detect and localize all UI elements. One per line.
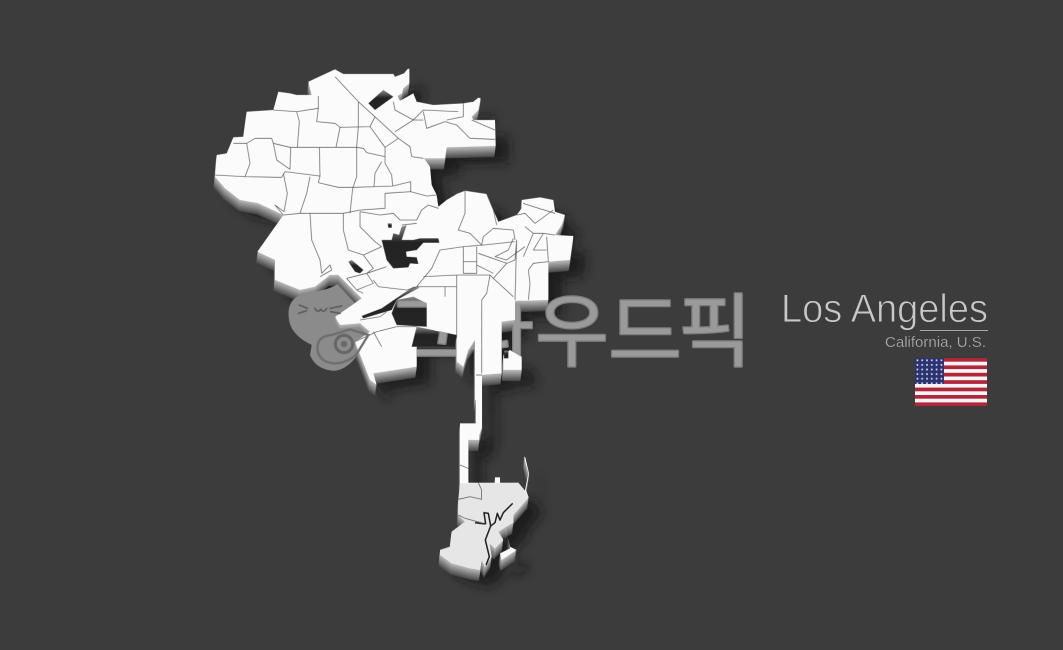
- watermark: Korean wordmark: [387, 288, 752, 377]
- harbor channels: [475, 503, 513, 565]
- harbor surface tint: [440, 483, 529, 570]
- cat face: [299, 305, 342, 313]
- title: city name: Los Angeles: [781, 287, 988, 331]
- icon: United States flag: [915, 358, 987, 406]
- map of Los Angeles: [214, 68, 587, 587]
- watermark: Korean wordmark: 그: [387, 288, 461, 377]
- title underline: [920, 330, 988, 331]
- map extrusion sides: [214, 70, 573, 581]
- watermark: Korean wordmark: 우: [535, 288, 609, 377]
- watermark: Korean wordmark: 라: [460, 288, 534, 377]
- map drop shadow: [228, 85, 587, 587]
- map top surface: [215, 68, 573, 570]
- camera: [317, 329, 368, 363]
- watermark: Korean wordmark: 드: [608, 288, 682, 377]
- subtitle: state and country: California, U.S.: [885, 335, 986, 351]
- holes and channels in the map: [348, 90, 508, 358]
- harbor district borders: [458, 375, 483, 523]
- harbor channels and borders: [440, 375, 529, 570]
- watermark: cat mascot: [289, 284, 368, 371]
- district borders: [215, 77, 555, 373]
- camera lens: [335, 335, 353, 353]
- watermark: [289, 284, 752, 377]
- cat body: [289, 284, 367, 371]
- watermark: Korean wordmark: 픽: [678, 288, 752, 377]
